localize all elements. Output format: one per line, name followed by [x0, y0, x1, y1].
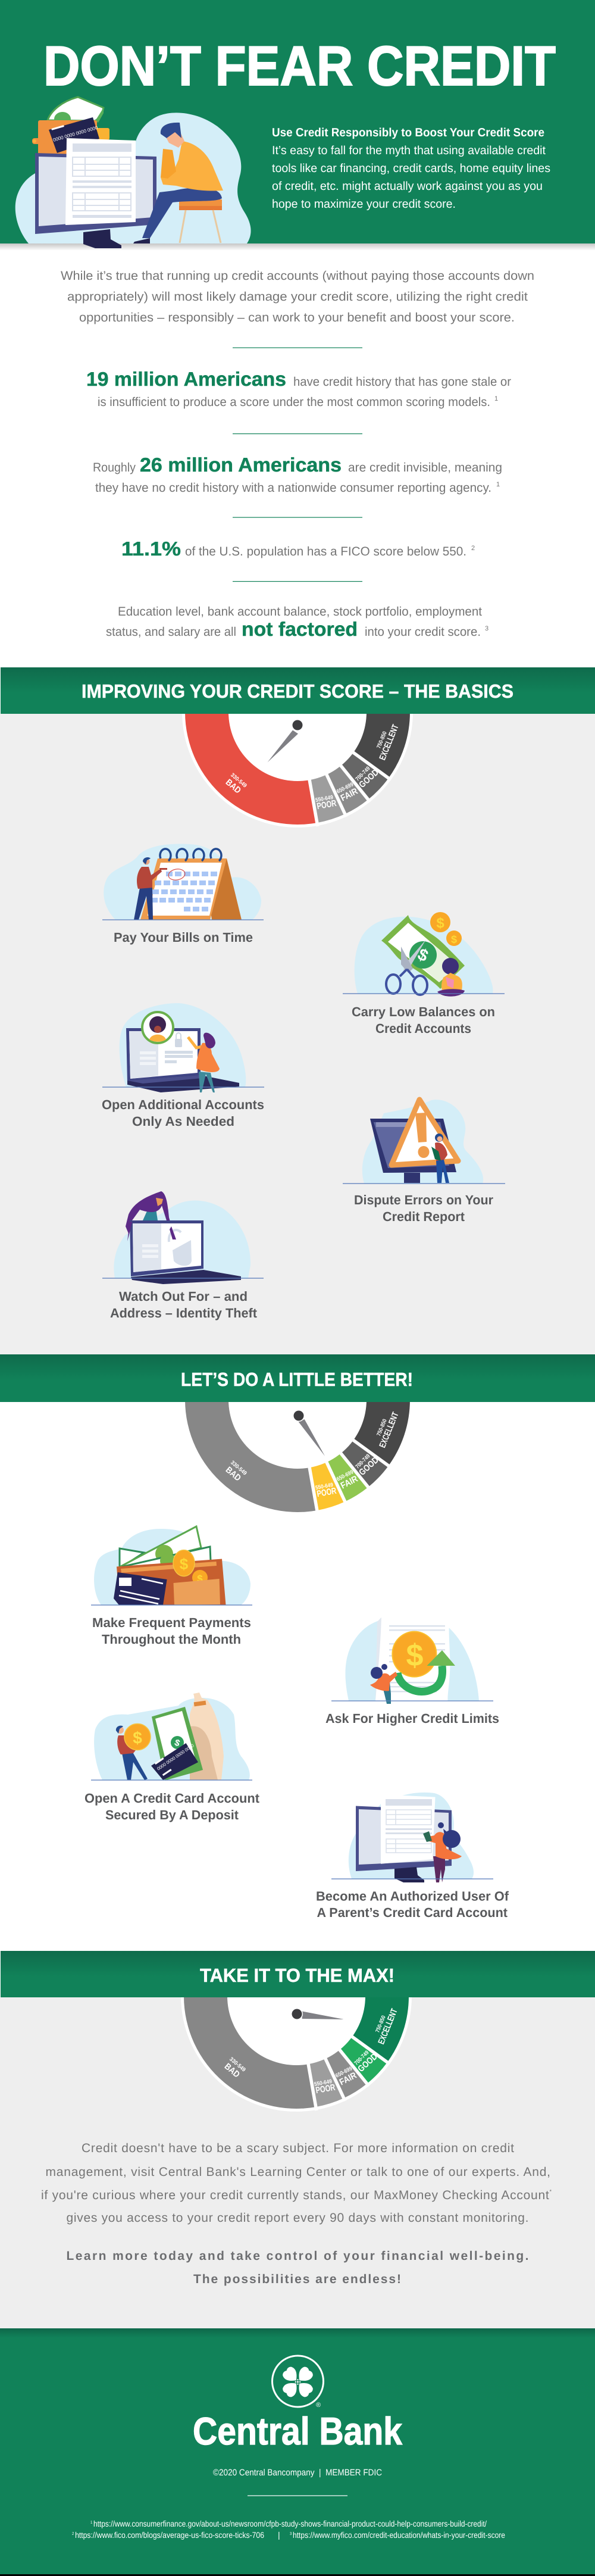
- stat: not factored: into your credit score.: [365, 625, 481, 639]
- footnotes: [72, 2519, 505, 2540]
- section band: let's do a little better: [0, 1354, 595, 1402]
- label: secured credit card: [84, 1791, 260, 1822]
- illustration: calendar: [102, 844, 264, 920]
- hero copy: hope to maximize your credit score.: [272, 198, 456, 211]
- hero illustration: worried man at computer: 0000 0000 0000 0000: [52, 125, 99, 143]
- label: dispute errors: Dispute Errors on Your: [354, 1192, 493, 1207]
- hero copy: of credit, etc. might actually work against you as you: [272, 180, 543, 193]
- call to action: The possibilities are endless!: [193, 2272, 401, 2286]
- closing paragraph: *: [549, 2188, 552, 2194]
- illustration: secured card with deposit: [91, 1693, 252, 1781]
- gauge: max, needle on excellent: EXCELLENT: [376, 2007, 400, 2046]
- closing paragraph: management, visit Central Bank's Learning Center or talk to one of our experts. And,: [45, 2165, 550, 2179]
- label: authorized user: Become An Authorized User Of: [316, 1888, 509, 1904]
- footnotes: https://www.fico.com/blogs/average-us-fico-score-ticks-706: [75, 2530, 264, 2540]
- illustration: scissors cutting bill: [343, 912, 505, 997]
- copyright: ©2020 Central Bancompany | MEMBER FDIC: [213, 2468, 382, 2478]
- footnotes: 2: [72, 2532, 75, 2536]
- section band: improving your credit score: IMPROVING YOUR CREDIT SCORE – THE BASICS: [82, 680, 513, 702]
- intro paragraph: opportunities – responsibly – can work to your benefit and boost your score.: [79, 311, 515, 324]
- label: higher limits: Ask For Higher Credit Limits: [325, 1711, 499, 1726]
- gauge: basics, needle on bad: 650-699: [336, 781, 355, 795]
- hero copy: tools like car financing, credit cards, home equity lines: [272, 162, 550, 175]
- stat: 26 million Americans: Roughly: [93, 461, 136, 474]
- footnotes: https://www.consumerfinance.gov/about-us/newsroom/cfpb-study-shows-financial-product-could-help-consumers-build-credit/: [93, 2519, 487, 2528]
- gauge: max, needle on excellent: 700-749: [353, 2050, 370, 2066]
- call to action: Learn more today and take control of your financial well-being.: [67, 2249, 529, 2263]
- gauge: better, needle on poor/fair: GOOD: [357, 1455, 381, 1478]
- gauge: max, needle on excellent: POOR: [315, 2082, 336, 2096]
- closing paragraph: Credit doesn't have to be a scary subject. For more information on credit: [82, 2141, 514, 2155]
- logo: wordmark: Central Bank: [193, 2409, 403, 2453]
- stat: 11.1 percent: 2: [471, 545, 475, 552]
- call to action: [67, 2249, 529, 2286]
- stat: not factored: status, and salary are all: [106, 625, 236, 639]
- gauge: basics, needle on bad: POOR: [316, 798, 337, 811]
- gauge: basics, needle on bad: FAIR: [339, 786, 359, 803]
- gauge: better, needle on poor/fair: [185, 1400, 410, 1514]
- panel: take it to the max background: [0, 1997, 595, 2328]
- logo: central bank clover: ®: [316, 2402, 321, 2409]
- gauge: basics, needle on bad: 330-549: [229, 772, 248, 789]
- label: secured credit card: Secured By A Deposit: [105, 1807, 239, 1822]
- label: carry low balances: Carry Low Balances on: [352, 1004, 495, 1019]
- gauge: better, needle on poor/fair: 330-549: [229, 1460, 248, 1476]
- illustration: warning triangle on monitor: [343, 1100, 505, 1184]
- hero copy: [272, 126, 550, 211]
- stat: 26 million Americans: they have no credit history with a nationwide consumer reporting agency.: [95, 481, 491, 495]
- page background: white intro: [0, 0, 595, 667]
- gauge: max, needle on excellent: 750-850: [374, 2015, 387, 2034]
- gauge: better, needle on poor/fair: BAD: [224, 1465, 243, 1484]
- label: make frequent payments: [92, 1615, 251, 1647]
- stat: not factored: Education level, bank account balance, stock portfolio, employment: [118, 605, 482, 619]
- section band: take it to the max: TAKE IT TO THE MAX!: [200, 1965, 394, 1986]
- footnotes: 3: [290, 2532, 293, 2536]
- closing paragraph: gives you access to your credit report every 90 days with constant monitoring.: [67, 2211, 528, 2225]
- label: make frequent payments: Make Frequent Payments: [92, 1615, 251, 1630]
- stat: 26 million Americans: [93, 454, 502, 495]
- illustration: secured card with deposit: $: [173, 1738, 181, 1749]
- title: DON’T FEAR CREDIT: [43, 35, 556, 97]
- closing paragraph: [41, 2141, 552, 2225]
- gauge: better, needle on poor/fair: 650-699: [336, 1469, 355, 1483]
- gauge: basics, needle on bad: 700-749: [355, 766, 371, 782]
- stat: 11.1 percent: 11.1%: [121, 538, 181, 560]
- label: identity theft: Address – Identity Theft: [110, 1306, 258, 1320]
- gauge: better, needle on poor/fair: 700-749: [355, 1453, 371, 1470]
- section band: improving your credit score: [1, 667, 595, 714]
- illustration: secured card with deposit: $: [133, 1729, 142, 1747]
- stat: not factored: not factored: [242, 618, 358, 640]
- hero copy: It’s easy to fall for the myth that using available credit: [272, 144, 546, 157]
- label: secured credit card: Open A Credit Card Account: [84, 1791, 260, 1806]
- header panel: [0, 0, 595, 251]
- footnotes: |: [278, 2530, 280, 2540]
- label: identity theft: Watch Out For – and: [119, 1289, 248, 1304]
- stat: 26 million Americans: are credit invisible, meaning: [348, 461, 502, 474]
- gauge: max, needle on excellent: 330-549: [228, 2056, 247, 2073]
- illustration: authorized user: [331, 1793, 493, 1882]
- gauge: max, needle on excellent: BAD: [223, 2061, 242, 2080]
- gauge: better, needle on poor/fair: POOR: [316, 1486, 337, 1499]
- closing paragraph: if you're curious where your credit currently stands, our MaxMoney Checking Account: [41, 2188, 549, 2202]
- label: authorized user: [316, 1888, 509, 1920]
- stat: 19 million Americans: [86, 368, 511, 409]
- illustration: laptop and woman: [102, 1003, 264, 1092]
- footer panel: [0, 2328, 595, 2574]
- label: open additional accounts: [102, 1097, 264, 1129]
- hero illustration: worried man at computer: [15, 97, 251, 248]
- gauge: max, needle on excellent: 550-649: [314, 2078, 333, 2088]
- stat: 26 million Americans: 1: [496, 481, 500, 488]
- panel: do a little better background: [0, 1402, 595, 1951]
- illustration: scissors cutting bill: $: [436, 916, 444, 931]
- gauge: max, needle on excellent: 650-699: [334, 2065, 353, 2079]
- label: dispute errors: Credit Report: [383, 1209, 465, 1224]
- section band: let's do a little better: LET’S DO A LITTLE BETTER!: [181, 1369, 413, 1390]
- intro paragraph: [61, 269, 534, 324]
- illustration: wallet with cash: $: [197, 1573, 203, 1585]
- gauge: better, needle on poor/fair: FAIR: [339, 1474, 359, 1491]
- label: carry low balances: Credit Accounts: [375, 1021, 471, 1036]
- label: make frequent payments: Throughout the Month: [102, 1632, 241, 1647]
- gauge: better, needle on poor/fair: 750-850: [375, 1418, 389, 1437]
- gauge: max, needle on excellent: GOOD: [356, 2052, 380, 2074]
- footnotes: 1: [90, 2521, 93, 2525]
- intro paragraph: appropriately) will most likely damage your credit score, utilizing the right credit: [67, 290, 528, 304]
- label: dispute errors: [354, 1192, 493, 1224]
- illustration: scissors cutting bill: $: [415, 945, 431, 966]
- illustration: wallet with cash: [91, 1526, 252, 1606]
- label: open additional accounts: Only As Needed: [132, 1114, 234, 1129]
- stat: 11.1 percent: [121, 538, 475, 560]
- stat: 19 million Americans: is insufficient to produce a score under the most common scoring models.: [98, 395, 490, 409]
- section band: take it to the max: [1, 1951, 595, 1997]
- label: authorized user: A Parent’s Credit Card Account: [317, 1905, 508, 1920]
- gauge: basics, needle on bad: [182, 712, 413, 828]
- footnotes: https://www.myfico.com/credit-education/whats-in-your-credit-score: [293, 2530, 505, 2540]
- stat: 11.1 percent: of the U.S. population has a FICO score below 550.: [185, 545, 466, 558]
- stat: 19 million Americans: 1: [494, 395, 498, 402]
- gauge: basics, needle on bad: 550-649: [315, 794, 334, 804]
- gauge: max, needle on excellent: [181, 1996, 412, 2112]
- gauge: basics, needle on bad: GOOD: [357, 767, 381, 790]
- stat: 19 million Americans: have credit history that has gone stale or: [293, 375, 511, 389]
- label: open additional accounts: Open Additional Accounts: [102, 1097, 264, 1112]
- illustration: thief reaching into laptop: [102, 1191, 264, 1284]
- illustration: wallet with cash: $: [180, 1555, 189, 1573]
- illustration: scissors cutting bill: $: [451, 933, 457, 945]
- illustration: higher credit limits: $: [406, 1638, 424, 1673]
- panel: the basics background: [0, 714, 595, 1354]
- gauge: max, needle on excellent: FAIR: [338, 2071, 358, 2087]
- stat: 26 million Americans: 26 million Americans: [140, 454, 342, 476]
- illustration: secured card with deposit: 0000 0000 0000 0000: [156, 1743, 195, 1772]
- gauge: basics, needle on bad: 750-850: [375, 730, 389, 750]
- label: carry low balances: [352, 1004, 495, 1036]
- gauge: better, needle on poor/fair: EXCELLENT: [377, 1411, 401, 1449]
- stat: not factored: 3: [485, 625, 488, 632]
- hero copy: Use Credit Responsibly to Boost Your Credit Score: [272, 126, 544, 139]
- intro paragraph: While it’s true that running up credit accounts (without paying those accounts down: [61, 269, 534, 283]
- stat: not factored: [106, 605, 488, 640]
- label: identity theft: [110, 1289, 258, 1320]
- illustration: higher credit limits: [331, 1616, 493, 1704]
- stat: 19 million Americans: 19 million Americans: [86, 368, 286, 390]
- gauge: basics, needle on bad: BAD: [224, 777, 243, 796]
- gauge: better, needle on poor/fair: 550-649: [315, 1482, 334, 1491]
- gauge: basics, needle on bad: EXCELLENT: [377, 723, 401, 761]
- label: pay your bills on time: Pay Your Bills on Time: [114, 930, 253, 945]
- logo: central bank clover: [273, 2356, 324, 2409]
